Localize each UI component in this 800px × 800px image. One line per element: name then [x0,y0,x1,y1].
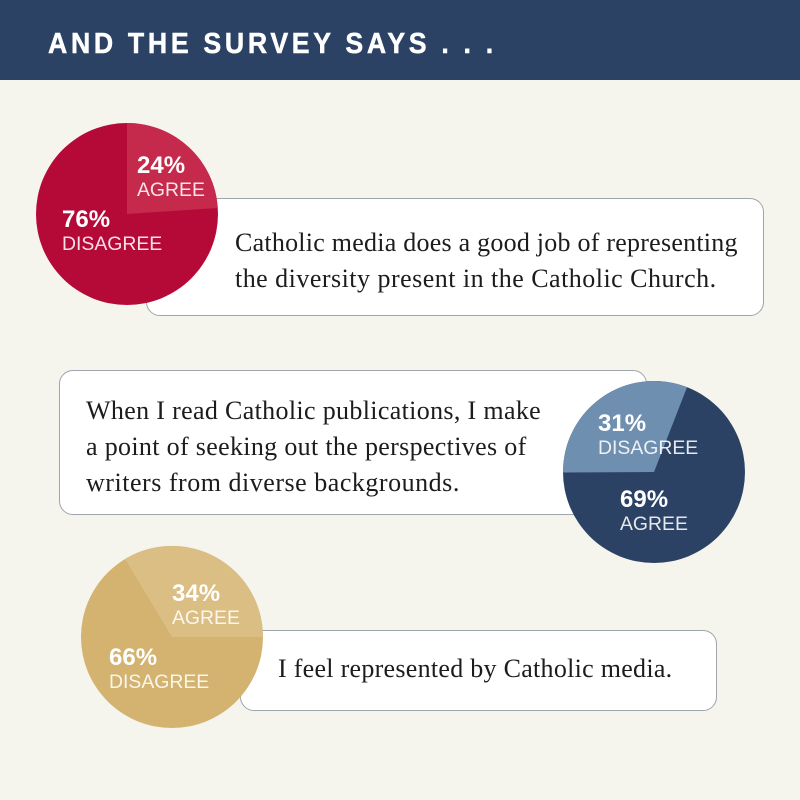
label: 24% agree: 24% [137,152,185,179]
statement text: feeling represented: I feel represented by Catholic media. [278,654,672,683]
label: 76% disagree: DISAGREE [62,233,162,255]
label: 34% agree [172,580,240,629]
label: 31% disagree: 31% [598,410,646,437]
pie chart: seeking diverse writers [563,381,745,563]
label: 69% agree [620,486,688,535]
label: 31% disagree [598,410,698,459]
statement text: diversity in Catholic media: the diversity present in the Catholic Church. [235,264,717,293]
pie chart: feeling represented [81,546,263,728]
statement text: seeking diverse writers: When I read Catholic publications, I make [86,396,541,425]
statement box: diversity in Catholic media [146,198,764,316]
label: 66% disagree [109,644,209,693]
label: 69% agree: AGREE [620,513,688,535]
label: 24% agree: AGREE [137,179,205,201]
statement text: seeking diverse writers: writers from diverse backgrounds. [86,468,460,497]
statement box: feeling represented [240,630,717,711]
label: 24% agree [137,152,205,201]
statement text: diversity in Catholic media: Catholic media does a good job of representing [235,228,738,257]
label: 66% disagree: DISAGREE [109,671,209,693]
title: AND THE SURVEY SAYS . . . [48,28,497,60]
label: 69% agree: 69% [620,486,668,513]
header banner [0,0,800,80]
pie chart: Catholic media diversity [36,123,218,305]
label: 31% disagree: DISAGREE [598,437,698,459]
label: 34% agree: 34% [172,580,220,607]
statement box: seeking diverse writers [59,370,647,515]
statement text: seeking diverse writers [86,396,541,497]
label: 66% disagree: 66% [109,644,157,671]
label: 76% disagree: 76% [62,206,110,233]
label: 76% disagree [62,206,162,255]
statement text: seeking diverse writers: a point of seeking out the perspectives of [86,432,527,461]
statement text: diversity in Catholic media [235,228,738,293]
label: 34% agree: AGREE [172,607,240,629]
